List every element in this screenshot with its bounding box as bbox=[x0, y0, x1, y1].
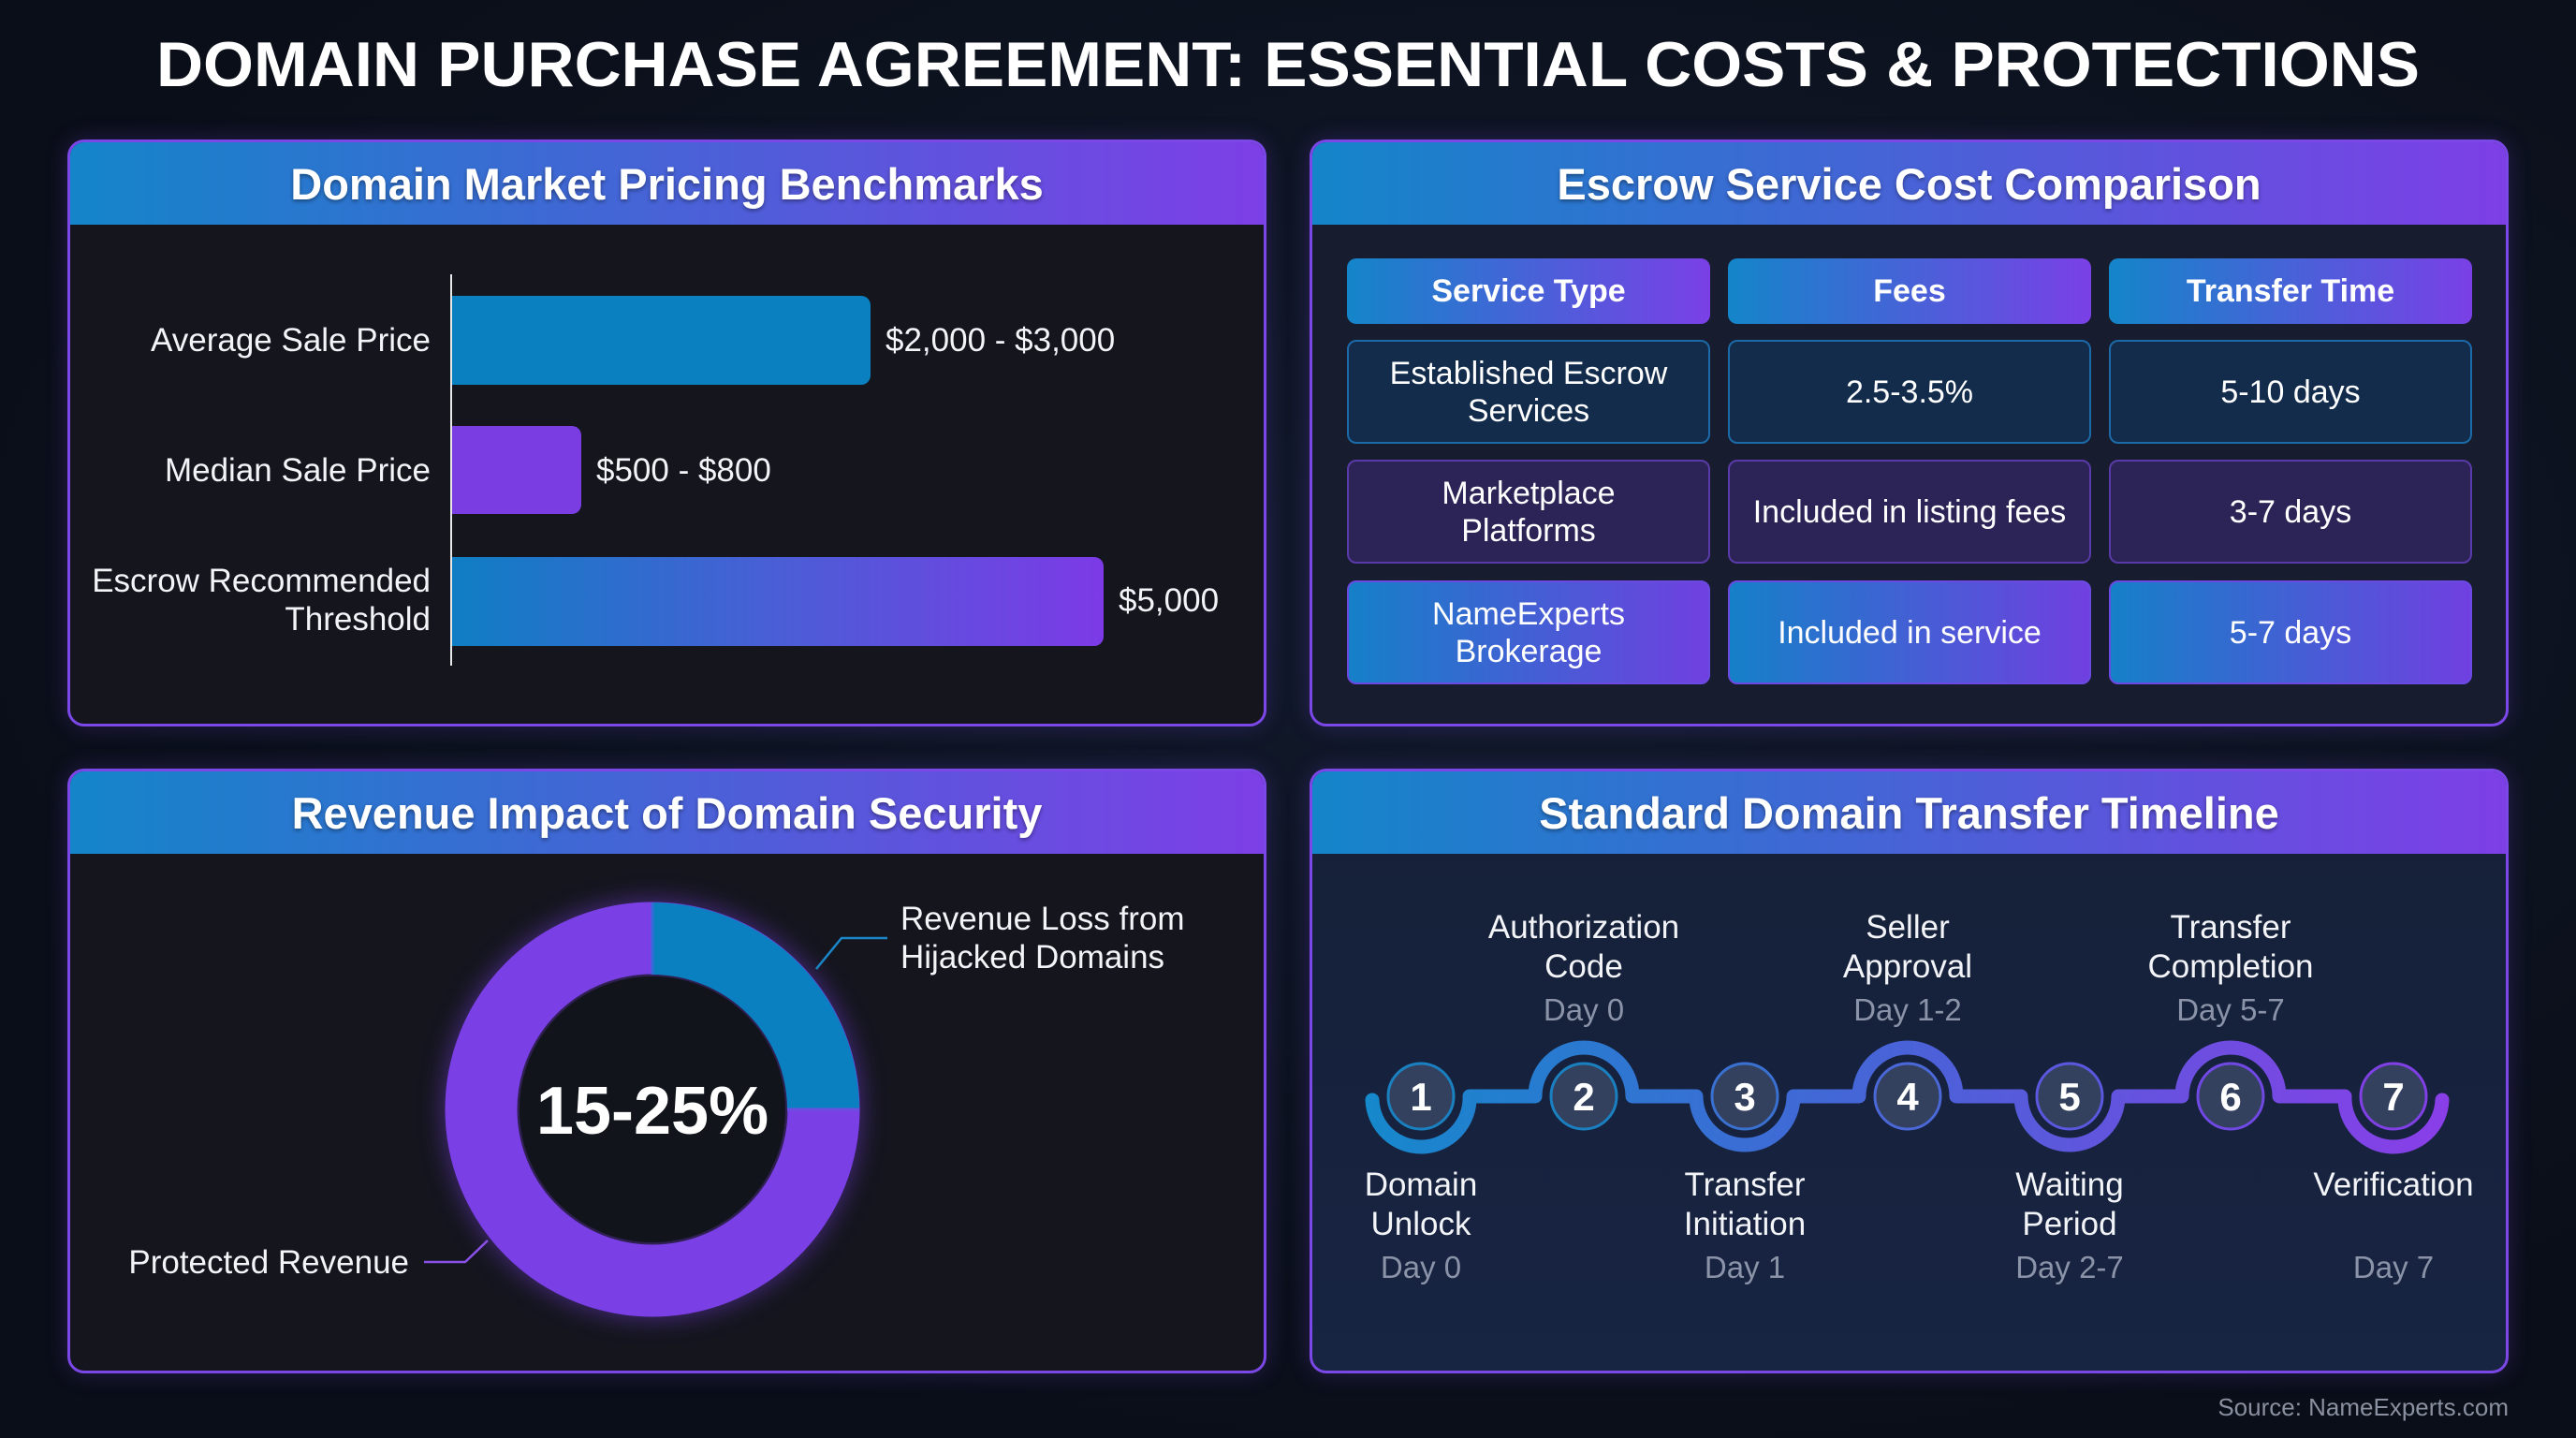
table: 3-7 days bbox=[2230, 494, 2351, 530]
timeline: Waiting bbox=[2015, 1167, 2124, 1203]
table: Included in service bbox=[1778, 614, 2042, 650]
timeline: 5 bbox=[2058, 1075, 2081, 1119]
source note: Source: NameExperts.com bbox=[2217, 1393, 2509, 1421]
table: Transfer Time bbox=[2187, 273, 2394, 309]
heading: escrow: Escrow Service Cost Comparison bbox=[1557, 159, 2261, 208]
table bbox=[1347, 258, 2472, 684]
donut chart: Hijacked Domains bbox=[900, 939, 1164, 976]
heading: escrow bbox=[1312, 142, 2506, 225]
timeline: 2 bbox=[1573, 1075, 1595, 1119]
timeline: Initiation bbox=[1684, 1206, 1806, 1242]
timeline: Seller bbox=[1866, 909, 1950, 946]
bar chart: Average Sale Price bbox=[151, 322, 431, 359]
timeline: Day 5-7 bbox=[2176, 992, 2285, 1027]
table: Fees bbox=[1873, 273, 1946, 309]
bar: escrow bbox=[452, 557, 1104, 646]
timeline: Day 0 bbox=[1544, 992, 1624, 1027]
bar chart: $2,000 - $3,000 bbox=[886, 322, 1115, 359]
timeline: 4 bbox=[1896, 1075, 1919, 1119]
timeline: Transfer bbox=[2170, 909, 2291, 946]
timeline: Day 1 bbox=[1705, 1250, 1785, 1284]
heading: revenue bbox=[70, 771, 1264, 854]
timeline: Authorization bbox=[1488, 909, 1679, 946]
heading: pricing bbox=[70, 142, 1264, 225]
timeline: 7 bbox=[2382, 1075, 2405, 1119]
table: Established Escrow bbox=[1390, 356, 1667, 391]
timeline: Transfer bbox=[1684, 1167, 1806, 1203]
bar: median bbox=[452, 426, 581, 514]
heading: pricing: Domain Market Pricing Benchmarks bbox=[290, 159, 1044, 208]
table: Included in listing fees bbox=[1753, 494, 2066, 530]
timeline bbox=[1365, 909, 2474, 1284]
donut chart: Protected Revenue bbox=[128, 1244, 409, 1281]
table: NameExperts bbox=[1432, 595, 1625, 631]
bar: average bbox=[452, 296, 871, 385]
table: Marketplace bbox=[1442, 476, 1616, 511]
bar chart: $500 - $800 bbox=[596, 452, 771, 489]
timeline: 1 bbox=[1410, 1075, 1432, 1119]
table: Platforms bbox=[1461, 513, 1596, 549]
bar chart bbox=[92, 274, 1219, 666]
bar chart: Median Sale Price bbox=[165, 452, 431, 489]
timeline: Day 2-7 bbox=[2015, 1250, 2124, 1284]
donut chart bbox=[128, 885, 1184, 1334]
timeline: Approval bbox=[1843, 948, 1972, 985]
timeline: Verification bbox=[2313, 1167, 2474, 1203]
title: DOMAIN PURCHASE AGREEMENT: ESSENTIAL COSTS & PROTECTIONS bbox=[156, 29, 2420, 100]
heading: timeline: Standard Domain Transfer Timeline bbox=[1539, 788, 2279, 837]
bar chart: Threshold bbox=[285, 601, 431, 638]
timeline: Day 0 bbox=[1381, 1250, 1461, 1284]
timeline: 6 bbox=[2219, 1075, 2242, 1119]
bar chart: Escrow Recommended bbox=[92, 563, 431, 599]
timeline: Period bbox=[2022, 1206, 2117, 1242]
timeline: Day 7 bbox=[2353, 1250, 2434, 1284]
heading: timeline bbox=[1312, 771, 2506, 854]
panel: transfer timeline bbox=[1310, 769, 2509, 1373]
table: Services bbox=[1468, 393, 1589, 429]
panel: revenue impact bbox=[67, 769, 1266, 1373]
table: Brokerage bbox=[1456, 633, 1602, 668]
table: Service Type bbox=[1431, 273, 1626, 309]
panel: pricing benchmarks bbox=[67, 139, 1266, 726]
timeline: 3 bbox=[1734, 1075, 1756, 1119]
timeline: Day 1-2 bbox=[1853, 992, 1962, 1027]
donut chart: 15-25% bbox=[536, 1074, 768, 1149]
bar chart: $5,000 bbox=[1119, 582, 1219, 619]
timeline: Code bbox=[1544, 948, 1623, 985]
table: 5-7 days bbox=[2230, 614, 2351, 650]
donut chart: Revenue Loss from bbox=[900, 901, 1184, 937]
timeline: Completion bbox=[2147, 948, 2314, 985]
table: 2.5-3.5% bbox=[1846, 374, 1973, 410]
timeline: Unlock bbox=[1371, 1206, 1471, 1242]
panel: escrow comparison bbox=[1310, 139, 2509, 726]
timeline: Domain bbox=[1365, 1167, 1477, 1203]
heading: revenue: Revenue Impact of Domain Security bbox=[292, 788, 1042, 837]
table: 5-10 days bbox=[2220, 374, 2361, 410]
